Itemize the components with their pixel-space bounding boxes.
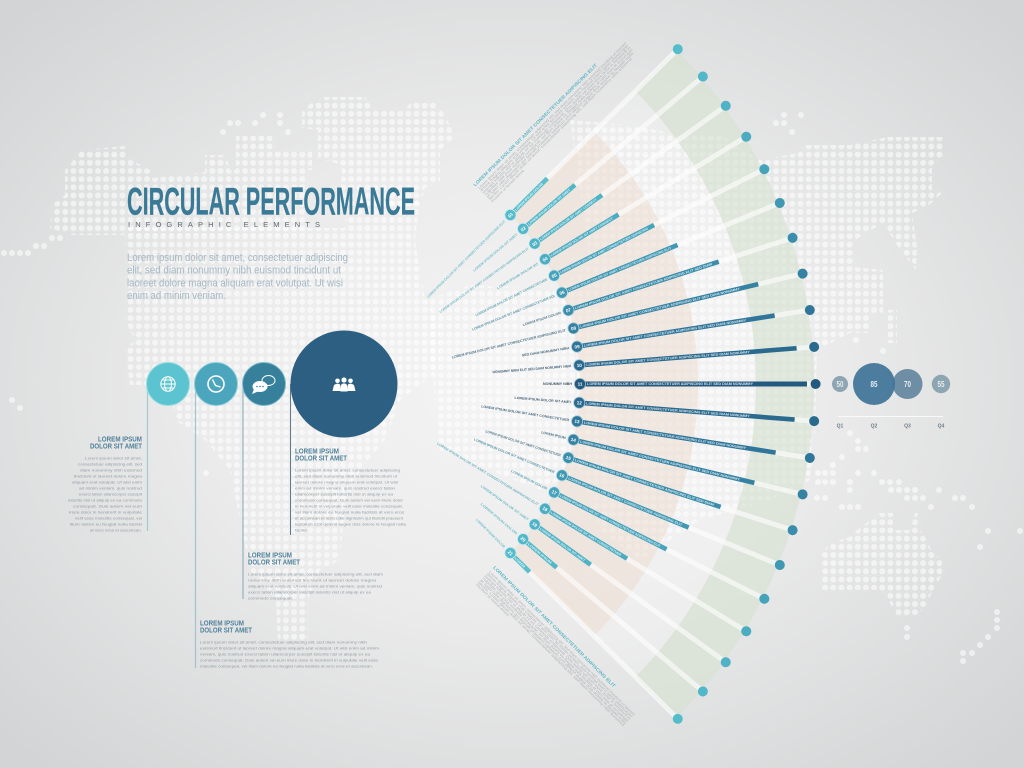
spoke 01: 01 [507, 211, 514, 219]
text: first item: DOLOR SIT AMET [90, 444, 143, 450]
spoke 17: LOREM IPSUM DOLOR [510, 469, 548, 491]
spoke 15 [484, 426, 799, 537]
spoke 12: LOREM IPSUM DOLOR SIT AMET [514, 396, 572, 404]
spoke 21: LOREM [514, 557, 526, 569]
spoke 09: 09 [574, 344, 580, 350]
intro paragraph: enim ad minim veniam. [127, 290, 226, 302]
spoke 19: 19 [531, 521, 538, 528]
text: second item: veniam, quis nostrud exerci tation ullamcorper suscipit lobortis nisl ut aliquip ex ea [200, 652, 371, 656]
spoke 16 [472, 434, 787, 572]
spoke 11: LOREM IPSUM DOLOR SIT AMET CONSECTETUER ADIPISCING ELIT SED DIAM NONUMMY [587, 382, 754, 386]
spoke 10: 10 [577, 363, 582, 368]
bottom rotated text block: tincidunt ut laoreet dolore. [475, 583, 511, 618]
text: fourth item: luptatum zzril delenit augue duis dolore te feugait nulla [295, 522, 407, 526]
spoke 14 [540, 427, 809, 501]
bottom rotated text block: suscipit lobortis nisl ut aliquip ex ea commodo consequat. Duis autem vel eum iriure dolor in hendrerit in [484, 574, 631, 721]
dotted world map [1, 97, 1023, 664]
text: fourth item: facilisi. [295, 528, 308, 532]
bubble Q2: 85 [870, 380, 878, 389]
spoke 12: 12 [577, 400, 582, 406]
icon: chat bubbles circle [242, 362, 286, 406]
quarterly bubble chart [832, 363, 950, 430]
spoke 16: LOREM IPSUM DOLOR SIT AMET CONSECTETUER [473, 438, 556, 475]
icon: people circle [290, 330, 398, 438]
spoke 07 [521, 231, 799, 330]
spoke 16: LOREM IPSUM DOLOR SIT AMET CONSECTETUER ADIPISCING ELIT [568, 476, 683, 527]
spoke 04: LOREM IPSUM DOLOR SIT AMET CONSECT [550, 217, 614, 257]
radial fan chart [423, 42, 821, 726]
spoke 03 [436, 98, 733, 317]
spoke 20 [478, 499, 710, 699]
spoke 03: 03 [531, 240, 539, 247]
spoke 13: 13 [574, 419, 580, 424]
panel: fourth item, people [290, 330, 407, 535]
text: second item [200, 620, 380, 668]
spoke 11 [543, 378, 821, 390]
spoke 12 [514, 392, 820, 427]
spoke 17: LOREM IPSUM DOLOR SIT AMET CONSECTETUER ADIPISCING ELIT [559, 494, 661, 548]
spoke 04 [494, 129, 753, 293]
text: third item: exerci tation ullamcorper suscipit lobortis nisl ut aliquip ex ea [248, 590, 372, 594]
spoke 20: LOREM IPSUM DOLOR [480, 502, 519, 536]
intro paragraph [127, 252, 348, 302]
text: fourth item: DOLOR SIT AMET [295, 456, 348, 462]
spoke 10: LOREM IPSUM DOLOR SIT AMET CONSECTETUER ADIPISCING ELIT SED DIAM NONUMMY [586, 350, 751, 367]
spoke 07: 07 [565, 307, 572, 314]
text: fourth item: ullamcorper suscipit lobortis nisl ut aliquip ex ea [295, 492, 394, 496]
top rotated text block: vulputate velit esse molestie consequat, vel illum dolore eu feugiat nulla facilisis at vero eros et accumsan [484, 48, 633, 197]
spoke 09: SED DIAM NONUMMY NIBH [521, 346, 570, 358]
spoke 13: LOREM IPSUM DOLOR SIT AMET CONSECTETUER ADIPISCING ELIT SED DIAM NONUMMY [584, 421, 747, 450]
text: first item: diam nonummy nibh euismod [80, 468, 142, 472]
bottom rotated text block: facilisi. Lorem ipsum dolor sit amet, consectetuer adipiscing elit, sed diam nonummy nibh euismod [477, 581, 625, 727]
bottom rotated text block: et iusto odio dignissim qui blandit praesent luptatum zzril delenit augue duis dolore te feugait nulla [479, 579, 627, 725]
bottom rotated text block: dolore magna aliquam erat volutpat. Ut wisi enim ad minim veniam, quis nostrud exerci tation ullamcorper [486, 572, 634, 719]
text: first item: consectetuer adipiscing elit, sed [78, 462, 142, 466]
spoke 09: LOREM IPSUM DOLOR SIT AMET CONSECTETUER ADIPISCING ELIT SED DIAM NONUMMY [584, 318, 747, 348]
text: first item: exerci tation ullamcorper suscipit [79, 492, 143, 496]
icon: globe circle [146, 362, 190, 406]
bottom rotated text block: Lorem ipsum dolor sit amet, consectetuer adipiscing elit, sed diam nonummy nibh euismod tincidunt ut laoreet [488, 570, 636, 716]
spoke 07: LOREM IPSUM DOLOR SIT AMET CONSECTETUER ADIPISCING ELIT SED DIAM [574, 262, 713, 310]
spoke 05: 05 [551, 272, 558, 279]
spoke 13: LOREM IPSUM DOLOR SIT AMET CONSECTETUER [481, 404, 570, 422]
spoke 10 [492, 341, 820, 378]
spoke 18: LOREM IPSUM DOLOR SIT AMET CONSECTETUER ADIPISCING ELIT [436, 442, 540, 507]
spoke 01 [423, 42, 685, 301]
spoke 05 [473, 162, 771, 320]
spoke 02: LOREM IPSUM DOLOR SIT AMET [527, 188, 571, 226]
text: first item: aliquam erat volutpat. Ut wisi enim [72, 480, 143, 484]
spoke 15: LOREM IPSUM DOLOR SIT AMET CONSECTETUER ADIPISCING ELIT SED DIAM [574, 458, 715, 507]
text: fourth item: Lorem ipsum dolor sit amet, consectetuer adipiscing [295, 468, 400, 472]
spoke 18: LOREM IPSUM DOLOR SIT AMET CONSECTETUER [550, 511, 623, 557]
top rotated text block: et iusto odio dignissim qui blandit praesent luptatum zzril delenit augue duis dolore te feugait nulla [486, 52, 634, 199]
axis labels [837, 424, 945, 430]
top rotated text block: facilisi. Lorem ipsum dolor sit amet, consectetuer adipiscing elit, sed diam nonummy nibh euismod [488, 57, 633, 201]
spoke 04: 04 [542, 256, 549, 263]
icon: clock circle [194, 362, 238, 406]
axis labels: Q3 [904, 424, 911, 430]
spoke 14: 14 [570, 437, 577, 443]
text: first item: consequat. Duis autem vel eum [73, 504, 143, 508]
intro paragraph: laoreet dolore magna aliquam erat volutpat. Ut wisi [127, 278, 343, 290]
spoke 13 [480, 401, 816, 464]
text: fourth item: enim ad minim veniam, quis nostrud exerci tation [295, 486, 395, 490]
spoke 21: LOREM IPSUM DOLOR [475, 518, 506, 549]
spoke 11: NONUMMY NIBH [543, 382, 573, 386]
text: second item: molestie consequat, vel illum dolore eu feugiat nulla facilisis at vero eros et accumsan. [200, 664, 373, 668]
top rotated text block: Lorem ipsum dolor sit amet, consectetuer adipiscing elit, sed diam nonummy nibh euismod tincidunt ut laoreet [477, 42, 627, 190]
spoke 03: LOREM IPSUM DOLOR SIT AMET CONSECT [539, 198, 598, 241]
axis labels: Q1 [837, 424, 844, 430]
spoke 12: LOREM IPSUM DOLOR SIT AMET CONSECTETUER ADIPISCING ELIT SED DIAM NONUMMY [586, 401, 751, 418]
spoke 08 [451, 267, 809, 363]
bottom rotated text block [475, 565, 641, 730]
text: first item: tincidunt ut laoreet dolore magna [74, 474, 143, 478]
spoke 20: LOREM IPSUM [527, 542, 553, 565]
bubble Q1: 50 [836, 380, 844, 389]
text: second item: DOLOR SIT AMET [200, 628, 253, 634]
spoke 21: 21 [507, 550, 514, 557]
spoke 14: LOREM IPSUM DOLOR SIT AMET CONSECTETUER ADIPISCING ELIT SED DIAM NONUMMY [580, 440, 741, 482]
spoke 17 [509, 466, 771, 606]
spoke 06: LOREM IPSUM DOLOR SIT AMET CONSECTETUER ADI [472, 294, 555, 332]
top rotated text block: LOREM IPSUM DOLOR SIT AMET CONSECTETUER ADIPISCING ELIT [472, 63, 598, 187]
spoke 06 [470, 196, 787, 335]
spoke 19: LOREM IPSUM DOLOR SIT AMET [480, 484, 530, 522]
text: first item: ad minim veniam, quis nostrud [79, 486, 142, 490]
intro paragraph: Lorem ipsum dolor sit amet, consectetuer adipiscing [127, 252, 348, 264]
text: first item: Lorem ipsum dolor sit amet, [85, 456, 142, 460]
spoke 10: NONUMMY NIBH ELIT SED DIAM NONUMMY NIBH [492, 364, 572, 374]
spoke 06: 06 [559, 289, 566, 296]
bubble Q3: 70 [904, 380, 911, 389]
spoke 20: 20 [519, 536, 527, 543]
text: fourth item: elit, sed diam nonummy nibh euismod tincidunt ut [295, 474, 398, 478]
top rotated text block [472, 37, 641, 204]
spoke 02: 02 [520, 225, 527, 233]
bubble Q4: 55 [938, 380, 945, 389]
text: fourth item: laoreet dolore magna aliquam erat volutpat. Ut wisi [295, 480, 398, 484]
spoke 11: 11 [578, 382, 583, 387]
text: first item: illum dolore eu feugiat nulla facilisi [70, 522, 142, 526]
spoke 18: 18 [541, 505, 549, 513]
spoke 15: LOREM IPSUM DOLOR SIT AMET CONSECTETUER [485, 429, 562, 458]
text: first item: velit esse molestie consequat, vel [75, 516, 142, 520]
text: third item: commodo consequat. [248, 596, 293, 600]
text: third item: nonummy nibh euismod tincidunt ut laoreet dolore magna [248, 578, 377, 582]
text: fourth item: LOREM IPSUM [295, 448, 339, 456]
top rotated text block: suscipit lobortis nisl ut aliquip ex ea commodo consequat. Duis autem vel eum iriure dolor in hendrerit in [482, 46, 631, 194]
spoke 16: 16 [559, 472, 566, 479]
text: third item: LOREM IPSUM [248, 552, 292, 560]
spoke 03: LOREM IPSUM DOLOR SIT AMET CONSECTETUER ADIPISCING ELIT [439, 246, 530, 314]
spoke 05: LOREM IPSUM DOLOR SIT AMET CONSECTETUER [475, 277, 548, 317]
panel: first item, globe [68, 362, 190, 532]
panel: second item, clock [194, 362, 380, 668]
text: second item: Lorem ipsum dolor sit amet, consectetuer adipiscing elit, sed diam nonummy nibh [200, 640, 367, 644]
spoke 01: LOREM IPSUM DOLOR SIT AMET CONSECTETUER ADIPISCING ELIT [426, 219, 507, 299]
spoke 21 [472, 515, 685, 726]
text: first item: at vero eros et accumsan. [90, 528, 142, 532]
text: third item [248, 552, 384, 600]
text: first item [68, 436, 143, 532]
text: third item: DOLOR SIT AMET [248, 560, 301, 566]
spoke 08: 08 [570, 325, 577, 331]
text: fourth item: et accumsan et iusto odio dignissim qui blandit praesent [295, 516, 404, 520]
spoke 08: LOREM IPSUM DOLOR SIT AMET CONSECTETUER ADIPISCING ELIT SED DIAM NONUMMY [580, 287, 741, 329]
text: second item: LOREM IPSUM [200, 620, 244, 628]
text: third item: Lorem ipsum dolor sit amet, consectetuer adipiscing elit, sed diam [248, 572, 384, 576]
spoke 04: LOREM IPSUM DOLOR SIT [496, 261, 540, 290]
bottom rotated text block: LOREM IPSUM DOLOR SIT AMET CONSECTETUER ADIPISCING ELIT [492, 565, 617, 688]
spoke 18 [434, 438, 753, 639]
intro paragraph: elit, sed diam nonummy nibh euismod tincidunt ut [127, 264, 341, 276]
spoke 02 [470, 69, 710, 275]
green band [635, 50, 814, 718]
spoke 19: LOREM IPSUM DOLOR SIT AMET [539, 527, 586, 562]
panel: third item, chat [242, 362, 384, 600]
text: first item: lobortis nisl ut aliquip ex ea commodo [68, 498, 143, 502]
spoke 19 [478, 481, 733, 670]
peach band [510, 132, 698, 636]
text: fourth item: commodo consequat. Duis autem vel eum iriure dolor [295, 498, 404, 502]
subtitle: INFOGRAPHIC ELEMENTS [128, 220, 320, 229]
text: first item: iriure dolor in hendrerit in vulputate [69, 510, 143, 514]
title: CIRCULAR PERFORMANCE [127, 180, 415, 224]
text: third item: aliquam erat volutpat. Ut wisi enim ad minim veniam, quis nostrud [248, 584, 382, 588]
spoke 14: LOREM IPSUM [541, 430, 566, 440]
spoke 06: LOREM IPSUM DOLOR SIT AMET CONSECTETUER ADIPISCING ELIT [568, 246, 672, 292]
text: fourth item: vel illum dolore eu feugiat nulla facilisis at vero eros [295, 510, 404, 514]
top rotated text block: tincidunt ut laoreet dolore. [490, 168, 526, 203]
axis labels: Q4 [938, 424, 945, 430]
text: second item: commodo consequat. Duis autem vel eum iriure dolor in hendrerit in vulputate velit esse [200, 658, 379, 662]
text: fourth item: in hendrerit in vulputate velit esse molestie consequat, [295, 504, 403, 508]
bottom rotated text block: vulputate velit esse molestie consequat, vel illum dolore eu feugiat nulla facilisis at vero eros et accumsan [482, 576, 629, 723]
spoke 07: LOREM IPSUM DOLOR [522, 311, 562, 327]
spoke 08: LOREM IPSUM DOLOR SIT AMET CONSECTETUER ADIPISCING ELIT [451, 328, 567, 359]
spoke 01: LOREM IPSUM DOLOR [514, 182, 544, 212]
spoke 15: 15 [565, 455, 572, 461]
text: second item: euismod tincidunt ut laoreet dolore magna aliquam erat volutpat. Ut wisi enim ad minim [200, 646, 380, 650]
axis labels: Q2 [871, 424, 878, 430]
spoke 17: 17 [551, 489, 558, 496]
text: first item: LOREM IPSUM [98, 436, 142, 444]
spoke 09 [521, 304, 816, 361]
fan base sector [510, 50, 814, 718]
spoke 02: LOREM IPSUM DOLOR SIT AMET [472, 232, 519, 273]
spoke 05: LOREM IPSUM DOLOR SIT AMET CONSECTETUER ADIPISCING [560, 226, 649, 274]
text: fourth item [295, 448, 407, 532]
top rotated text block: dolore magna aliquam erat volutpat. Ut wisi enim ad minim veniam, quis nostrud exerci tation ullamcorper [479, 43, 630, 192]
